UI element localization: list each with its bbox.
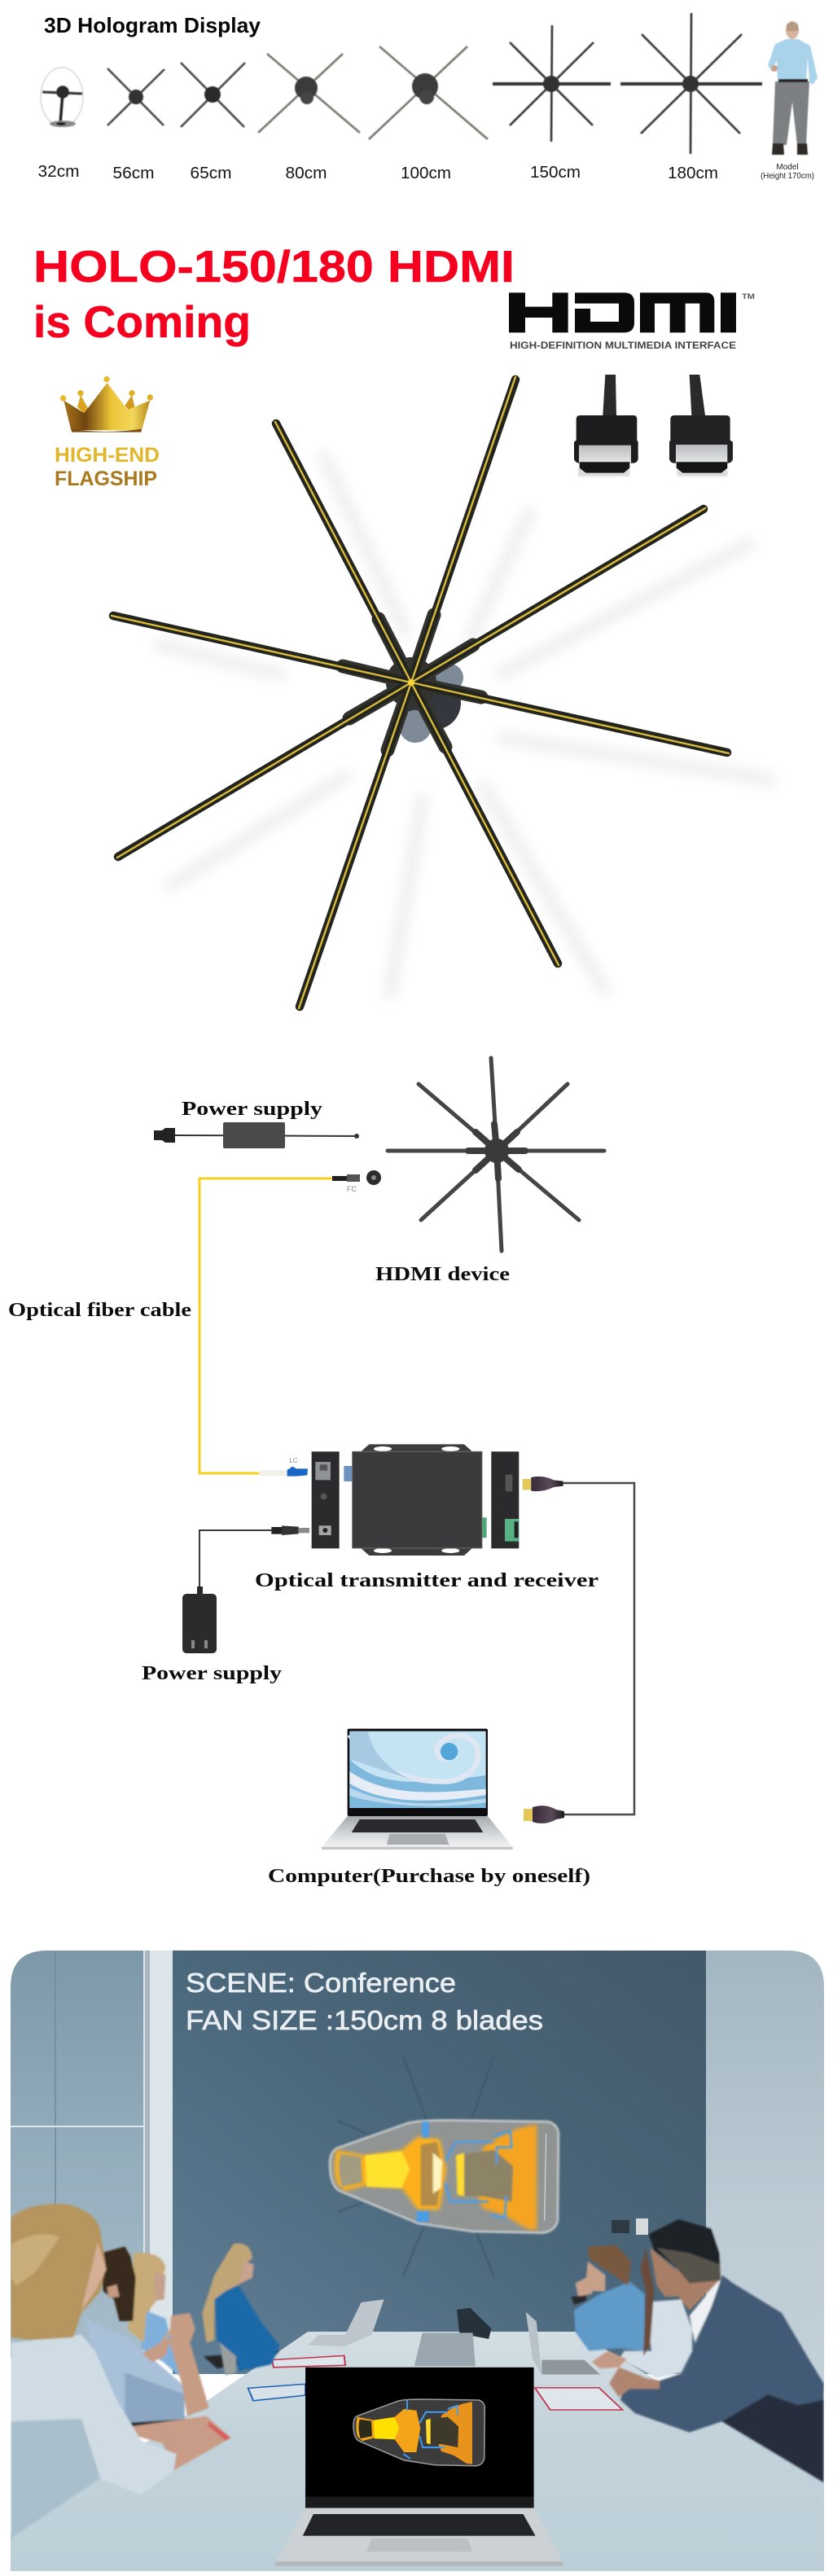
- size labels: 180cm: [668, 165, 718, 182]
- fan: 32cm with stand: [41, 68, 83, 127]
- red folder: [272, 2355, 345, 2368]
- person: woman in blue jacket: [202, 2244, 279, 2376]
- right folder: [535, 2388, 622, 2410]
- back walls: [11, 1951, 824, 2390]
- icon: gold crown badge: HIGH-END: [55, 444, 160, 467]
- fan shadow: [155, 452, 775, 998]
- pencil: [163, 2331, 170, 2340]
- person: front woman in white blouse: [11, 2204, 230, 2539]
- blade roots: [343, 615, 481, 750]
- person: woman with pale blue shirt: [128, 2253, 182, 2378]
- person: man in navy suit: [609, 2219, 824, 2482]
- table centre console: [414, 2332, 476, 2366]
- label: HDMI device: HDMI device: [375, 1264, 510, 1285]
- back laptop: [308, 2299, 384, 2346]
- fan: 65cm: [181, 63, 245, 127]
- person: woman in white top: [592, 2248, 692, 2378]
- size labels: 65cm: [191, 165, 231, 182]
- wiring diagram: [8, 1058, 634, 1887]
- size labels: 56cm: [112, 165, 155, 182]
- heading: HOLO-150/180 HDMI is Coming: is Coming: [33, 296, 251, 347]
- FC connector: [332, 1170, 381, 1193]
- hub disc: [399, 664, 463, 743]
- model caption: (Height 170cm): [761, 172, 814, 181]
- scene caption: [186, 1973, 542, 2030]
- power adapter bottom: [182, 1586, 217, 1653]
- power cable: [199, 1530, 273, 1592]
- model caption: [761, 163, 814, 181]
- foreground laptop: [275, 2368, 563, 2566]
- blade LED strips: [112, 377, 729, 1008]
- label: Power supply bottom: Power supply: [142, 1663, 282, 1684]
- faint fan blades on wall: [338, 2056, 493, 2276]
- items on table: [248, 2299, 622, 2410]
- blue folder: [248, 2384, 305, 2401]
- HDMI plug: [523, 1477, 563, 1491]
- fan: 56cm: [107, 68, 164, 125]
- model caption: Model: [776, 163, 799, 172]
- HDMI plug at laptop: [524, 1806, 564, 1823]
- HDMI logo: TM: [742, 292, 755, 301]
- person: bearded man: [84, 2246, 209, 2427]
- label: Optical fiber cable: Optical fiber cable: [8, 1300, 191, 1321]
- model figure: [768, 21, 818, 155]
- HDMI logo: HIGH-DEFINITION MULTIMEDIA INTERFACE: [510, 340, 736, 351]
- fan: 150cm: [493, 25, 611, 142]
- people: left side: [11, 2204, 279, 2539]
- power adapter top: [154, 1122, 359, 1148]
- power plug: [271, 1525, 309, 1535]
- icon: gold crown badge: FLAGSHIP: [55, 467, 157, 490]
- HDMI cable: [563, 1483, 634, 1815]
- fan: 100cm: [369, 46, 488, 139]
- size labels: 80cm: [285, 165, 327, 182]
- fan: 80cm: [258, 54, 360, 133]
- FC connector: FC: [347, 1185, 357, 1193]
- hologram on laptop screen: [353, 2399, 484, 2466]
- label: Power supply top: Power supply: [182, 1099, 322, 1120]
- size labels: 100cm: [401, 165, 451, 182]
- title: 3D Hologram Display: 3D Hologram Display: [44, 13, 261, 37]
- hologram fan: eight blades with shadow: [112, 377, 775, 1008]
- wall switches: [612, 2218, 648, 2235]
- HDMI logo: [509, 292, 755, 351]
- icon: HDMI connectors: [574, 375, 733, 476]
- fan: 180cm: [620, 13, 762, 154]
- scene caption: SCENE: Conference: [186, 1968, 456, 1998]
- size labels: 32cm: [37, 163, 80, 181]
- optical transmitter and receiver unit: [259, 1444, 563, 1556]
- scene caption: FAN SIZE :150cm 8 blades: [186, 2005, 543, 2035]
- panel: conference scene: [11, 1951, 824, 2571]
- section: size line-up: [37, 13, 818, 182]
- LC connector: [259, 1457, 308, 1477]
- blade bodies: [113, 380, 727, 1007]
- size labels: [37, 163, 718, 182]
- heading: HOLO-150/180 HDMI is Coming: HOLO-150/180 HDMI: [33, 241, 515, 292]
- label: Optical transmitter and receiver: Optical transmitter and receiver: [255, 1570, 598, 1591]
- LC connector: LC: [289, 1457, 298, 1464]
- HDMI device fan: [388, 1058, 604, 1251]
- telephone: [457, 2308, 491, 2339]
- icon: gold crown badge: [55, 376, 160, 490]
- hologram: turbine engine: [330, 2120, 559, 2233]
- heading: HOLO-150/180 HDMI is Coming: [33, 241, 515, 347]
- label: Computer: Computer(Purchase by oneself): [268, 1866, 590, 1887]
- laptop computer: [322, 1729, 513, 1850]
- conference table: [11, 2332, 824, 2571]
- optical fiber cable yellow: [199, 1178, 332, 1473]
- people: right side: [572, 2219, 824, 2482]
- right laptop: [526, 2312, 600, 2375]
- person: man in blue shirt: [572, 2245, 645, 2351]
- size labels: 150cm: [530, 164, 581, 182]
